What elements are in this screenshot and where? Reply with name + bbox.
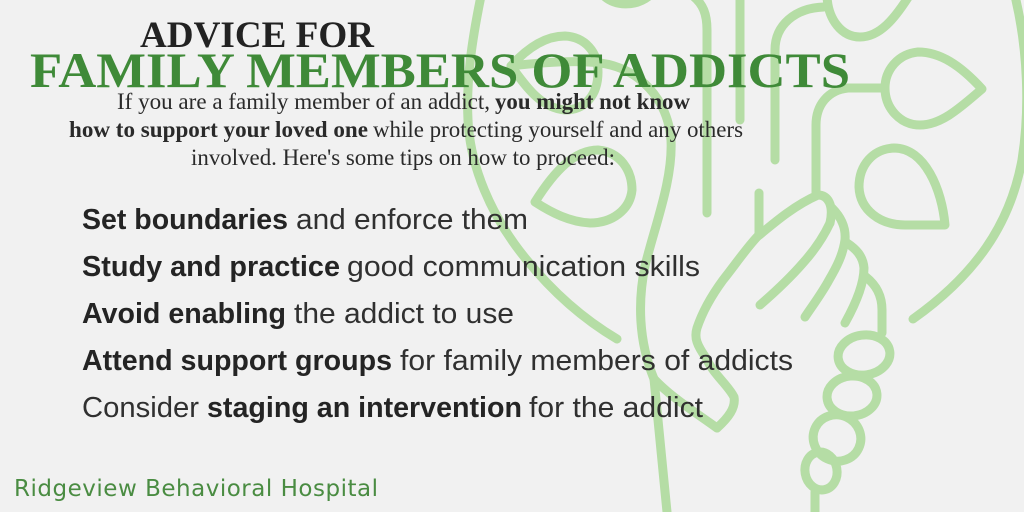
tip: intervention: Consider [82,392,199,424]
top right leaf fragment [827,0,909,37]
footer: hospital name: Ridgeview Behavioral Hospital [14,476,378,502]
intro paragraph [69,89,743,170]
top leaf fragment [604,0,649,4]
intro paragraph: involved. Here's some tips on how to proceed: [191,145,615,170]
intro paragraph: how to support your loved one [69,117,368,142]
finger one [760,223,830,305]
vertical stem two [736,0,744,120]
bead one [835,332,893,378]
tip: avoid enabling: Avoid enabling [82,298,286,330]
tip: communication [82,251,700,283]
hand outline [696,195,831,428]
intro paragraph: If you are a family member of an addict, [117,89,490,114]
large circle right arc [913,0,1024,319]
background illustration: hand holding plant [468,0,1024,512]
finger two [805,208,845,317]
tip: set boundaries [82,204,528,236]
central curved stem [511,62,671,512]
right leaf with stem [885,52,982,125]
intro paragraph: you might not know [495,89,690,114]
vertical stem one [693,0,707,213]
bead four [802,450,840,492]
tips list [82,204,793,424]
tip: support groups: for family members of addicts [400,345,793,377]
thumb [754,193,764,233]
tip: set boundaries: and enforce them [296,204,528,236]
large circle left arc [468,0,617,339]
bead two [825,374,879,418]
tip: intervention: for the addict [529,392,703,424]
tip: communication: good communication skills [347,251,700,283]
upper left leaf [511,36,598,110]
lower stem [810,492,820,512]
tip: support groups [82,345,793,377]
bead three [806,407,868,469]
tip: avoid enabling: the addict to use [294,298,514,330]
lower right leaf [859,148,945,225]
branch to hand [654,379,717,428]
tip: intervention: staging an intervention [207,392,522,424]
finger three [845,243,864,323]
tip: set boundaries: Set boundaries [82,204,288,236]
vertical stem three [775,7,824,160]
title: advice for: ADVICE FOR [140,14,375,55]
tip: support groups: Attend support groups [82,345,392,377]
tip: communication: Study and practice [82,251,340,283]
intro paragraph: while protecting yourself and any others [373,117,743,142]
wrist [866,277,882,333]
lower left leaf [535,150,632,223]
tip: avoid enabling [82,298,514,330]
tip: intervention [82,392,703,424]
title: family members of addicts: FAMILY MEMBERS OF ADDICTS [30,42,850,98]
